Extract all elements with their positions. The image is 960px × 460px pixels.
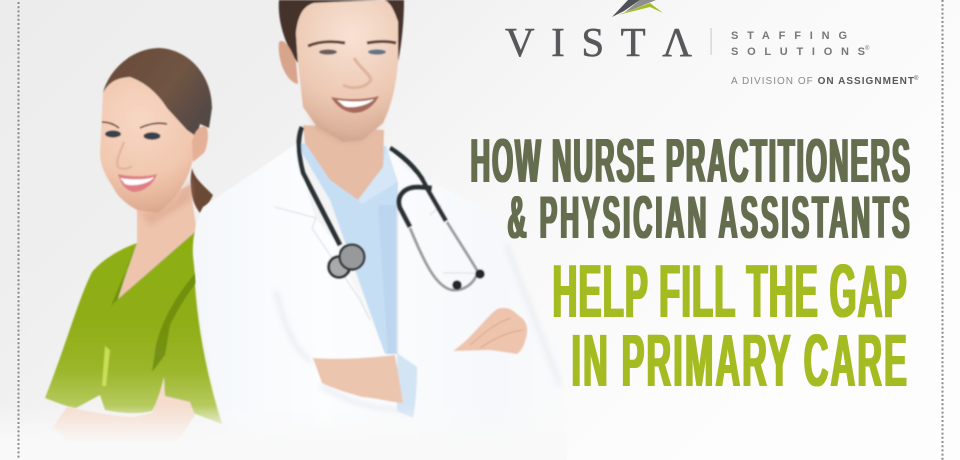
- green scrubs top: [45, 231, 222, 424]
- registered mark: ®: [865, 45, 870, 52]
- collar shadow: [358, 147, 397, 204]
- stethoscope U tube: [399, 187, 432, 227]
- nurse forearms: [53, 377, 195, 443]
- illustration: doctor in white coat: [193, 0, 566, 442]
- right dotted border: [942, 0, 944, 460]
- neck: [118, 185, 197, 300]
- smile: [118, 174, 157, 192]
- VISTA wordmark: VISTΛ: [505, 19, 692, 65]
- nose: [343, 58, 371, 88]
- blue shirt: [296, 143, 398, 354]
- title line two: & PHYSICIAN ASSISTANTS: [508, 184, 910, 251]
- registered mark small: ®: [914, 75, 919, 82]
- face: [100, 77, 197, 213]
- shirt cuff: [397, 353, 417, 418]
- logo divider: [710, 28, 712, 55]
- chest piece: [328, 244, 364, 278]
- brows and eyes: [308, 42, 396, 55]
- face: [296, 0, 398, 142]
- coat shadows: [276, 245, 560, 412]
- title line four: IN PRIMARY CARE: [572, 320, 907, 403]
- stubble shade: [305, 100, 386, 142]
- ear: [192, 126, 208, 162]
- nose shadow: [117, 142, 132, 169]
- stethoscope left tube: [299, 127, 340, 245]
- neck: [303, 125, 384, 200]
- scrub shading: [111, 243, 196, 372]
- white coat: [193, 144, 566, 442]
- finger lines: [470, 318, 523, 348]
- title line one: HOW NURSE PRACTITIONERS: [470, 128, 910, 196]
- logo mark: [612, 0, 663, 17]
- Staffing: STAFFING: [731, 30, 847, 42]
- illustration: nurse in green scrubs: [45, 48, 222, 443]
- division line: A DIVISION OF ON ASSIGNMENT: [731, 76, 914, 87]
- left dotted border: [18, 2, 20, 458]
- hand: [453, 308, 527, 354]
- ponytail: [191, 168, 213, 213]
- eyes and brows: [102, 122, 167, 140]
- jaw shadow: [140, 178, 192, 226]
- bottom fade: [0, 405, 567, 460]
- hair: [279, 0, 404, 63]
- ear tips: [452, 269, 485, 290]
- scrub highlights: [102, 346, 110, 386]
- shirt shade: [378, 205, 398, 354]
- Solutions: SOLUTIONS: [731, 46, 865, 58]
- stethoscope right tube: [390, 148, 446, 221]
- coat folds: [275, 200, 480, 354]
- smile: [331, 96, 379, 113]
- title line three: HELP FILL THE GAP: [552, 250, 907, 334]
- logo: Vista Staffing Solutions: [505, 0, 919, 87]
- forearm: [313, 355, 403, 403]
- ear: [279, 41, 298, 84]
- hair: [103, 48, 212, 137]
- title: help fill the gap in primary care: [552, 250, 907, 403]
- title: how nurse practitioners and physician assistants: [470, 128, 910, 251]
- silver tube: [410, 222, 478, 290]
